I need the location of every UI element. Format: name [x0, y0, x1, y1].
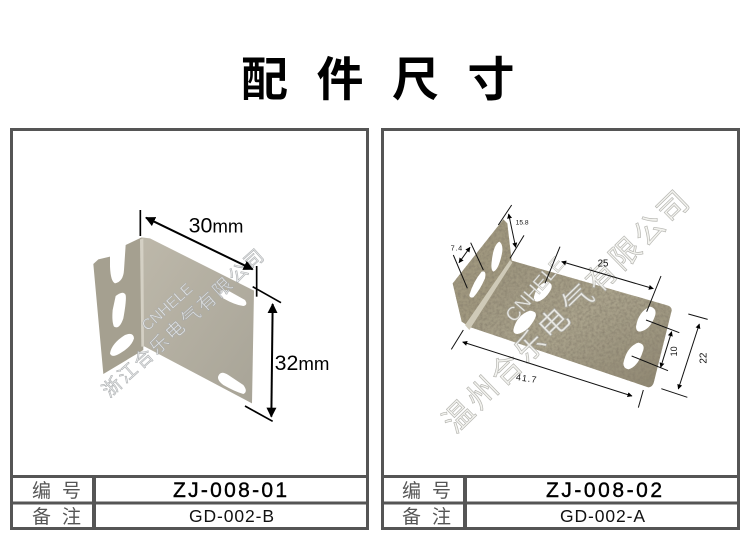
- watermark: CNHELE: [139, 280, 196, 335]
- label: 7.4: 7.4: [451, 243, 463, 252]
- dimension lines: [140, 210, 281, 421]
- panel: right bracket ZJ-008-02: [381, 130, 740, 528]
- spec table left: 编号: [32, 480, 92, 502]
- watermark: 浙江合乐电气有限公司: [98, 243, 270, 401]
- spec table right: ZJ-008-02: [546, 479, 662, 502]
- watermark: 温州合乐电气有限公司: [437, 183, 698, 439]
- label: 15.8: 15.8: [516, 220, 529, 227]
- spec table left: ZJ-008-01: [173, 479, 287, 502]
- dimension lines: [451, 205, 708, 408]
- photo: flat L bracket with dimensions: [437, 183, 709, 439]
- watermark: CNHELE: [502, 254, 569, 327]
- spec table left: [10, 476, 369, 528]
- spec table right: [381, 476, 740, 528]
- title: 配件尺寸: [241, 41, 543, 110]
- spec table left: GD-002-B: [189, 506, 274, 526]
- label: 10: 10: [669, 346, 679, 356]
- panel: left bracket ZJ-008-01: [10, 130, 369, 528]
- label: 22: 22: [698, 352, 709, 364]
- spec table right: 备注: [402, 506, 462, 528]
- label: 41.7: 41.7: [515, 372, 538, 385]
- spec table right: GD-002-A: [560, 506, 645, 526]
- photo: small L bracket with 30mm and 32mm dimensions: [93, 210, 329, 421]
- label: 30mm: 30mm: [189, 214, 243, 238]
- spec table right: 编号: [402, 480, 462, 502]
- label: 32mm: 32mm: [275, 351, 329, 375]
- label: 25: 25: [598, 259, 608, 270]
- spec table left: 备注: [32, 506, 92, 528]
